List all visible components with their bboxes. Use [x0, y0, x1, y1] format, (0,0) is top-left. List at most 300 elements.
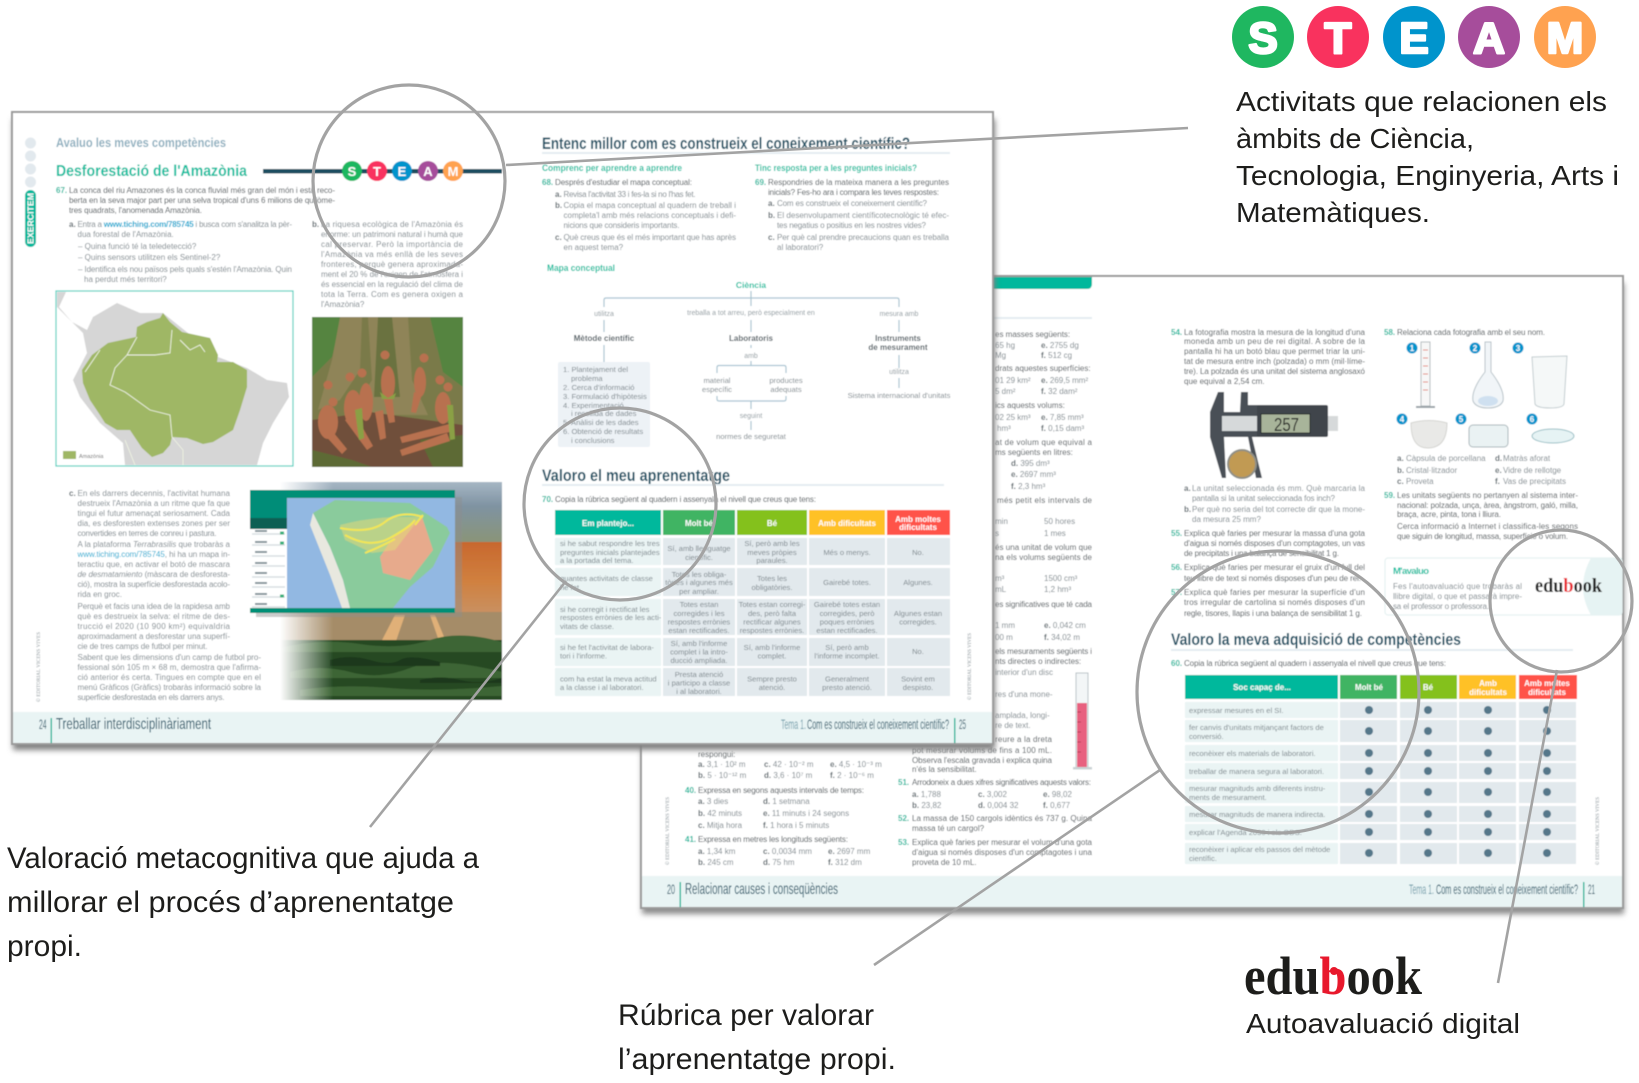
- text block: metacognitive assessment: [7, 842, 479, 963]
- text block: exercise 58: b.: [1397, 466, 1404, 475]
- text block: exercise 59: nacional: polzada, unça, àrea, àngstrom, galó, milla,: [1397, 501, 1578, 510]
- text block: exercise 58: e.: [1495, 466, 1502, 475]
- text block: part c: rida en groc.: [78, 590, 122, 599]
- table: learning rubric: Gairebé totes estan: [814, 600, 880, 609]
- map: Amazon region: Amazònia: [79, 454, 104, 460]
- text block: partially hidden exercises: e. 0,042 cm: [1044, 621, 1086, 630]
- text block: partially hidden exercises: re de text.: [995, 721, 1031, 730]
- icon: small STEAM bar: E: [398, 164, 407, 179]
- table: learning rubric: com ha estat la meva actitud: [560, 674, 657, 684]
- table: learning rubric: estan rectificades.: [668, 626, 730, 635]
- text block: exercises 39-41: a. 3,1 · 10² m: [698, 760, 746, 769]
- table: competency rubric: fer canvis d'unitats mitjançant factors de: [1189, 723, 1324, 732]
- text block: partially hidden exercises: interior d'un disc: [995, 668, 1053, 677]
- table: learning rubric: Algunes estan: [894, 609, 942, 618]
- text block: exercises 50-53: d'aigua si només disposes d'un comptagotes i una: [912, 848, 1093, 857]
- panel: back spread (pages 20-21): [641, 276, 1624, 914]
- icon: small STEAM bar: [263, 161, 502, 181]
- table: learning rubric: científic.: [685, 553, 713, 562]
- table: competency rubric: Bé: [1423, 683, 1434, 692]
- screenshot: Terrabrasilis platform: [250, 490, 462, 617]
- text block: Tinc resposta per a les preguntes inicials?: El desenvolupament científicotecnològic té efec-: [777, 211, 949, 220]
- text block: part c: www.tiching.com/785745, hi ha un mapa in-: [76, 550, 230, 559]
- table: learning rubric: presto atenció.: [822, 683, 872, 692]
- footer: left page: Com es construeix el coneixement científic?: [807, 716, 949, 732]
- logo: edubook: edubook: [1244, 946, 1422, 1006]
- heading: Valoro la meva adquisició de competències: Copia la rúbrica següent al quadern i assenyala el nivell que creus que tens:: [1184, 659, 1446, 668]
- text block: partially hidden exercises: 1,2 hm³: [1044, 585, 1071, 594]
- text block: Tinc resposta per a les preguntes inicials?: a.: [768, 199, 775, 208]
- text block: rubric description: [618, 999, 896, 1076]
- text block: Comprenc per aprendre a aprendre: Revisa l'activitat 33 i fes-la si no l'has fet.: [564, 190, 696, 199]
- text block: Tinc resposta per a les preguntes inicials?: Com es construeix el coneixement científic?: [777, 199, 928, 208]
- text block: exercise 67: l'Amazònia va més enllà de les seves: [321, 250, 463, 259]
- table: learning rubric: i participo a classe: [668, 678, 730, 688]
- text block: Comprenc per aprendre a aprendre: c.: [555, 233, 562, 242]
- text block: Tinc resposta per a les preguntes inicials?: b.: [768, 211, 775, 220]
- text block: Comprenc per aprendre a aprendre: nicions que consideris importants.: [564, 221, 680, 230]
- chart: concept map: treballa a tot arreu, però especialment en: [687, 310, 815, 317]
- text block: partially hidden exercises: 1500 cm³: [1044, 574, 1078, 583]
- callout: M'avaluo self-assessment box: [1385, 558, 1622, 615]
- table: learning rubric: Totes estan: [680, 600, 718, 609]
- text block: partially hidden exercises: 5 dm²: [995, 387, 1016, 396]
- heading: Valoro el meu aprenentatge: [542, 466, 944, 504]
- table: competency rubric: científic.: [1189, 854, 1217, 863]
- table: learning rubric: Sempre presto: [747, 674, 797, 684]
- text block: exercises 39-41: e. 2697 mm: [828, 847, 871, 856]
- table: learning rubric: No.: [912, 647, 924, 656]
- text block: exercises 39-41: a. 1,34 km: [698, 847, 736, 856]
- table: learning rubric: obligatòries.: [752, 583, 792, 592]
- text block: exercises 54-57: tre). La polzada és una unitat del sistema anglosaxó: [1184, 367, 1366, 376]
- table: learning rubric: Sovint em: [901, 674, 935, 684]
- text block: STEAM description: [1236, 86, 1619, 228]
- table: competency rubric: mesurar magnituds amb diferents instru-: [1189, 784, 1326, 793]
- footer: left page: [13, 712, 992, 743]
- table: learning rubric: Sí, amb l'informe: [744, 643, 800, 652]
- table: competency rubric: © EDITORIAL VICENS VIVES: [1595, 797, 1601, 865]
- table: learning rubric: [555, 510, 973, 700]
- text block: exercise 58: Cristal·litzador: [1406, 466, 1457, 475]
- icon: large STEAM logo: A: [1473, 14, 1505, 63]
- text block: rubric description: Rúbrica per valorar: [618, 999, 874, 1032]
- text block: Tinc resposta per a les preguntes inicials?: al laboratori?: [777, 243, 824, 252]
- text block: Comprenc per aprendre a aprendre: [542, 163, 736, 252]
- text block: part c: trucció el 2020 (10 900 km²) equivaldria: [78, 622, 231, 631]
- table: learning rubric: meves pròpies: [747, 548, 797, 557]
- table: learning rubric: dificultats: [899, 523, 937, 532]
- text block: exercises 54-57: de precipitats i una balança de sensibilitat 1 g.: [1184, 549, 1339, 558]
- text block: exercises 39-41: © EDITORIAL VICENS VIVES: [665, 797, 671, 865]
- table: learning rubric: Sí, però amb les: [744, 539, 800, 548]
- callout: M'avaluo self-assessment box: sa el professor o professora.: [1393, 602, 1489, 611]
- text block: exercises 54-57: pantalla hi ha un botó blau que permet triar la uni-: [1184, 347, 1365, 356]
- text block: exercises 39-41: Expressa en segons aquests intervals de temps:: [698, 786, 864, 795]
- text block: exercise 67: ment el 20 % de l'oxigen de l'atmosfera i: [321, 270, 463, 279]
- text block: Tinc resposta per a les preguntes inicials?: inicials? Fes-ho ara i compara les teves respostes:: [768, 188, 939, 197]
- text block: part c: [36, 489, 262, 702]
- text block: digital self-assessment: Autoavaluació digital: [1246, 1008, 1520, 1039]
- text block: exercise 67: l'Amazònia?: [321, 300, 365, 309]
- table: learning rubric: Generalment: [825, 674, 870, 684]
- heading: Valoro la meva adquisició de competències: 60.: [1171, 659, 1182, 668]
- footer: left page: Treballar interdisciplinàriament: [56, 716, 211, 733]
- table: learning rubric: Bé: [767, 519, 778, 528]
- text block: partially hidden exercises: e. 2755 dg: [1041, 341, 1079, 350]
- text block: exercises 54-57: moneda amb un peu de rei digital. A sobre de la: [1184, 337, 1366, 346]
- chart: concept map: normes de seguretat: [716, 432, 787, 441]
- text block: exercise 58: d.: [1495, 454, 1502, 463]
- chart: concept map: utilitza: [889, 369, 909, 376]
- table: competency rubric: Molt bé: [1355, 683, 1384, 692]
- heading: Mapa conceptual: Mapa conceptual: [547, 263, 615, 274]
- table: competency rubric: dificultats: [1469, 688, 1507, 697]
- text block: metacognitive assessment: Valoració metacognitiva que ajuda a: [7, 842, 479, 875]
- text block: part c: ció anterior és certa. Tingues en compte que en el: [78, 673, 261, 682]
- table: learning rubric: si he fet l'activitat de labora-: [560, 643, 654, 652]
- text block: Tinc resposta per a les preguntes inicials?: Respondries de la mateixa manera a les preguntes: [768, 178, 949, 187]
- icon: lab glassware photos: 1: [1410, 344, 1415, 353]
- text block: partially hidden exercises: hm³: [997, 424, 1011, 433]
- text block: exercise 58: a.: [1397, 454, 1404, 463]
- table: learning rubric: corregides i les: [673, 609, 725, 618]
- table: competency rubric: [1185, 675, 1601, 865]
- text block: Tinc resposta per a les preguntes inicials?: [755, 163, 950, 252]
- text block: exercises 54-57: a.: [1184, 484, 1191, 493]
- table: competency rubric: explicar l'Agenda 2030 i els ODS.: [1189, 828, 1302, 837]
- table: learning rubric: si he corregit i rectificat les: [560, 605, 650, 614]
- text block: exercises 39-41: b. 245 cm: [698, 858, 734, 867]
- text block: exercises 39-41: c. 42 · 10⁻² m: [764, 760, 814, 769]
- text block: Comprenc per aprendre a aprendre: en aquest tema?: [564, 243, 624, 252]
- chart: concept map: 3. Formulació d'hipòtesis: [563, 392, 647, 401]
- text block: exercises 50-53: n'és la sensibilitat.: [912, 765, 977, 774]
- text block: exercises 54-57: d'aigua si només disposes d'un comptagotes, un vas: [1184, 539, 1365, 548]
- table: learning rubric: Amb dificultats: [818, 519, 876, 528]
- footer: left page: 24: [39, 716, 47, 732]
- chart: concept map: mesura amb: [880, 311, 919, 318]
- text block: exercise 67: cal preservar. Però la importància de: [321, 240, 464, 249]
- table: learning rubric: atenció.: [759, 683, 785, 692]
- text block: exercises 54-57: 57.: [1171, 588, 1182, 597]
- text block: exercises 50-53: Observa l'escala gravada i explica quina: [912, 756, 1053, 765]
- text block: Tinc resposta per a les preguntes inicials?: c.: [768, 233, 775, 242]
- text block: Comprenc per aprendre a aprendre: a.: [555, 190, 562, 199]
- text block: partially hidden exercises: drats aquestes superfícies:: [995, 364, 1091, 373]
- table: learning rubric: complet i la intro-: [670, 648, 728, 656]
- chart: concept map: i recollida de dades: [571, 409, 637, 418]
- table: learning rubric: tòries i algunes més: [665, 578, 733, 587]
- chart: concept map: 6. Obtenció de resultats: [563, 427, 643, 436]
- table: learning rubric: i al laboratori.: [676, 687, 722, 696]
- text block: exercises 39-41: [665, 750, 882, 867]
- chart: concept map: Laboratoris: [729, 334, 774, 343]
- footer: back spread: Relacionar causes i conseqüències: [685, 881, 838, 898]
- table: competency rubric: Amb: [1479, 679, 1497, 688]
- text block: partially hidden exercises: min: [995, 517, 1008, 526]
- table: competency rubric: reconèixer i aplicar els passos del mètode: [1189, 845, 1330, 854]
- text block: exercises 39-41: Expressa en metres les longituds següents:: [698, 835, 848, 844]
- icon: small STEAM bar: S: [348, 164, 357, 179]
- text block: partially hidden exercises: és una unitat de volum que: [995, 543, 1093, 552]
- table: learning rubric: despisto.: [903, 683, 933, 692]
- text block: exercises 39-41: c. Mitja hora: [698, 821, 743, 830]
- table: learning rubric: Més o menys.: [823, 548, 871, 557]
- text block: exercises 54-57: b.: [1184, 505, 1191, 514]
- text block: exercise 67: enorme: un patrimoni natural i humà que: [321, 230, 464, 239]
- text block: partially hidden exercises: f. 34,02 m: [1044, 633, 1080, 642]
- callout: edubook lens and leader line: [1490, 530, 1632, 983]
- text block: partially hidden exercises: 65 hg: [995, 341, 1015, 350]
- text block: exercise 58: c.: [1397, 477, 1404, 486]
- panel: front spread (pages 24-25): [12, 112, 995, 750]
- text block: exercises 54-57: teu llibre de text si només disposes d'un peu de rei.: [1184, 574, 1361, 583]
- text block: exercise 67: tres quadrats, l'anomenada Amazònia.: [69, 206, 202, 215]
- text block: exercises 39-41: d. 75 hm: [763, 858, 795, 867]
- text block: metacognitive assessment: millorar el procés d’aprenentatge: [7, 886, 454, 919]
- text block: exercise 59: Les unitats següents no pertanyen al sistema inter-: [1397, 491, 1578, 500]
- text block: exercises 50-53: e. 98,02: [1043, 790, 1072, 799]
- icon: small STEAM bar: T: [373, 164, 381, 179]
- teal header tab: [990, 277, 1092, 289]
- text block: partially hidden exercises: 00 m: [995, 633, 1013, 642]
- text block: exercise 67: – Quina funció té la teledetecció?: [78, 242, 197, 251]
- text block: exercises 50-53: pot mesurar volums de fins a 100 mL.: [912, 746, 1052, 755]
- icon: lab glassware photos: 2: [1473, 344, 1478, 353]
- text block: part c: convertides en terres de conreu i pastura.: [78, 529, 216, 538]
- text block: exercises 54-57: da mesura 25 mm?: [1192, 515, 1261, 524]
- table: competency rubric: Amb moltes: [1524, 679, 1570, 688]
- text block: exercise 67: La conca del riu Amazones és la conca fluvial més gran del món i està reco-: [69, 186, 335, 195]
- text block: exercise 59: Cerca informació a Internet i classifica-les segons: [1397, 522, 1578, 531]
- text block: exercise 67: 67.: [56, 186, 67, 195]
- text block: Comprenc per aprendre a aprendre: Què creus que és el més important que has après: [564, 233, 736, 242]
- text block: Comprenc per aprendre a aprendre: Copia el mapa conceptual al quadern de treball i: [564, 201, 736, 210]
- text block: exercises 54-57: regle, tisores, llapis i una balança de sensibilitat 1 g.: [1184, 609, 1362, 618]
- text block: Tinc resposta per a les preguntes inicials?: 69.: [755, 178, 766, 187]
- icon: digital caliper with coin: [1210, 392, 1338, 478]
- text block: partially hidden exercises: es masses següents:: [995, 330, 1070, 339]
- callout: learning rubric lens and leader line: [370, 408, 716, 827]
- text block: STEAM description: àmbits de Ciència,: [1236, 123, 1474, 154]
- text block: Tinc resposta per a les preguntes inicials?: Per què cal prendre precaucions quan es treballa: [777, 233, 950, 242]
- table: learning rubric: tori i l'informe.: [560, 652, 607, 660]
- icon: lab glassware photos: 5: [1459, 415, 1464, 424]
- text block: Comprenc per aprendre a aprendre: Comprenc per aprendre a aprendre: [542, 163, 682, 174]
- table: competency rubric: conversió.: [1189, 732, 1224, 741]
- text block: partially hidden exercises: f. 32 dam²: [1041, 387, 1078, 396]
- text block: exercises 50-53: b. 23,82: [912, 801, 942, 810]
- text block: exercises 54-57: Explica què faries per mesurar el gruix d'un full del: [1184, 563, 1365, 572]
- text block: Comprenc per aprendre a aprendre: b.: [555, 201, 562, 210]
- table: learning rubric: complet.: [758, 652, 786, 660]
- text block: Comprenc per aprendre a aprendre: 68.: [542, 178, 553, 187]
- table: competency rubric: reconèixer els materials de laboratori.: [1189, 749, 1316, 758]
- text block: partially hidden exercises: f. 512 cg: [1041, 351, 1072, 360]
- table: learning rubric: Presta atenció: [675, 670, 723, 679]
- text block: exercises 39-41: 41.: [685, 835, 696, 844]
- text block: exercises 54-57: que equival a 2,54 cm.: [1184, 377, 1264, 386]
- callout: M'avaluo self-assessment box: edubook: [1535, 576, 1602, 597]
- text block: exercises 50-53: 53.: [898, 838, 909, 847]
- table: learning rubric: Sí, però amb: [825, 643, 869, 652]
- chart: concept map: material: [703, 376, 731, 385]
- text block: exercises 50-53: proveta de 10 mL.: [912, 858, 976, 867]
- text block: Comprenc per aprendre a aprendre: Després d'estudiar el mapa conceptual:: [555, 178, 692, 187]
- text block: exercise 67: ha perdut més territori?: [84, 275, 167, 284]
- table: learning rubric: per ampliar.: [679, 587, 719, 596]
- text block: exercises 39-41: 40.: [685, 786, 696, 795]
- text block: partially hidden exercises: e. 2697 mm³: [1011, 470, 1056, 479]
- text block: exercises 54-57: Explica què faries per mesurar la superfície d'un: [1184, 588, 1365, 597]
- text block: part c: de desmatamiento (màscara de desforesta-: [78, 570, 230, 579]
- text block: exercises 50-53: c. 3,002: [978, 790, 1007, 799]
- text block: exercise 67: berta en la seva major part per una selva tropical d'uns 6 milions de quilòme-: [69, 196, 335, 205]
- chart: concept map: 2. Cerca d'informació: [563, 383, 635, 392]
- text block: exercises 54-57: Explica què faries per mesurar la massa d'una gota: [1184, 529, 1366, 538]
- chart: concept map: 1. Plantejament del: [563, 365, 628, 374]
- chart: concept map: Ciència: [736, 280, 766, 290]
- text block: exercises 50-53: massa té un cargol?: [912, 824, 985, 833]
- text block: exercises 50-53: a. 1,788: [912, 790, 941, 799]
- chart: concept map: 4. Experimentació: [563, 401, 624, 410]
- table: learning rubric: he fet.: [560, 583, 581, 592]
- table: learning rubric: Em plantejo...: [582, 519, 634, 528]
- photo: indigenous people in the rainforest: [312, 317, 463, 467]
- table: competency rubric: dificultats: [1528, 688, 1566, 697]
- heading: Valoro el meu aprenentatge: Copia la rúbrica següent al quadern i assenyala el nivell que creus que tens:: [555, 495, 816, 504]
- chart: concept map: Mètode científic: [574, 334, 635, 343]
- text block: partially hidden exercises: 1 mes: [1044, 529, 1066, 538]
- text block: exercises 39-41: b. 42 minuts: [698, 809, 742, 818]
- table: competency rubric: ments de mesurament.: [1189, 793, 1267, 802]
- text block: exercises 39-41: a. 3 dies: [698, 797, 728, 806]
- icon: small STEAM bar: M: [448, 164, 458, 179]
- text block: partially hidden exercises: 02 25 km³: [995, 413, 1031, 422]
- text block: exercise 58: Càpsula de porcellana: [1406, 454, 1486, 463]
- table: learning rubric: quantes activitats de classe: [560, 574, 653, 583]
- map: Amazon region: [56, 291, 293, 466]
- table: learning rubric: No.: [912, 548, 924, 557]
- table: learning rubric: estan rectificades.: [816, 626, 878, 635]
- table: learning rubric: si he sabut respondre les tres: [560, 539, 660, 548]
- table: learning rubric: preguntes inicials plantejades: [560, 548, 660, 557]
- text block: part c: tingui el futur amenaçat seriosament. Cada: [78, 509, 231, 518]
- chart: concept map: adequats: [770, 385, 802, 394]
- table: learning rubric: Algunes.: [903, 578, 933, 587]
- text block: part c: destrueix l'Amazònia a un ritme que fa que: [78, 499, 231, 508]
- text block: exercises 39-41: e. 4,5 · 10⁻³ m: [830, 760, 882, 769]
- text block: exercises 54-57: tat de mesura entre inch (polzada) o mm (mil·líme-: [1184, 357, 1365, 366]
- text block: exercise 67: La riquesa ecològica de l'Amazònia és: [321, 220, 463, 229]
- table: learning rubric: des, però falta: [748, 609, 797, 618]
- text block: exercise 67: a.: [69, 220, 76, 229]
- text block: STEAM description: Activitats que relacionen els: [1236, 86, 1607, 117]
- text block: exercises 50-53: Arrodoneix a dues xifres significatives aquests valors:: [912, 778, 1091, 787]
- text block: exercise 58: Vidre de rellotge: [1503, 466, 1562, 475]
- text block: exercise 58: [1384, 328, 1566, 486]
- table: learning rubric: Molt bé: [685, 519, 714, 528]
- footer: left page: Tema 1.: [781, 716, 806, 732]
- text block: exercise 67: fronteres, perquè genera aproximada-: [321, 260, 463, 269]
- text block: exercises 50-53: d. 0,004 32: [978, 801, 1019, 810]
- text block: part c: cie de tres camps de futbol per minut.: [78, 642, 208, 651]
- text block: exercises 54-57: 54.: [1171, 328, 1182, 337]
- chart: concept map: específic: [702, 385, 732, 394]
- text block: exercises 54-57: Per què no seria del tot correcte dir que la mone-: [1192, 505, 1365, 514]
- text block: exercises 54-57: La fotografia mostra la mesura de la longitud d'una: [1184, 328, 1366, 337]
- text block: partially hidden exercises: e. 269,5 mm²: [1041, 376, 1088, 385]
- text block: metacognitive assessment: propi.: [7, 930, 82, 963]
- text block: partially hidden exercises: na els volums següents de: [995, 553, 1093, 562]
- heading: Valoro el meu aprenentatge: Valoro el meu aprenentatge: [542, 466, 730, 485]
- text block: part c: Sabent que les dimensions d'un camp de futbol pro-: [78, 653, 261, 662]
- callout: M'avaluo self-assessment box: M'avaluo: [1393, 566, 1429, 577]
- table: learning rubric: Amb moltes: [895, 515, 941, 524]
- text block: partially hidden exercises: e. 7,85 mm³: [1041, 413, 1084, 422]
- table: learning rubric: paraules.: [756, 556, 788, 565]
- text block: partially hidden exercises: més petit els intervals de: [997, 496, 1093, 505]
- text block: exercises 54-57: tros irregular de cartolina si només disposes d'un: [1184, 598, 1365, 607]
- icon: large STEAM logo: S: [1248, 14, 1278, 63]
- table: learning rubric: rectificar algunes: [743, 618, 801, 626]
- text block: part c: què es destrueix la selva: el ritme de des-: [78, 612, 230, 621]
- text block: partially hidden exercises: d. 395 dm³: [1011, 459, 1050, 468]
- icon: large STEAM logo: T: [1325, 14, 1352, 63]
- text block: exercise 58: Relaciona cada fotografia amb el seu nom.: [1397, 328, 1545, 337]
- text block: exercise 67: – Identifica els nou països pels quals s'estén l'Amazònia. Quin: [78, 265, 292, 274]
- text block: Tinc resposta per a les preguntes inicials?: Tinc resposta per a les preguntes inicials?: [755, 163, 917, 174]
- table: learning rubric: Sí, amb llenguatge: [667, 544, 731, 553]
- chart: concept map: seguint: [740, 413, 762, 420]
- table: learning rubric: respostes errònies de les acti-: [560, 613, 662, 622]
- text block: STEAM description: Tecnologia, Enginyeria, Arts i: [1236, 160, 1619, 191]
- icon: large STEAM logo: [1232, 6, 1596, 68]
- chart: concept map: amb: [744, 353, 758, 360]
- table: learning rubric: Gairebé totes.: [823, 578, 871, 587]
- icon: lab glassware photos: [1396, 342, 1574, 448]
- icon: lab glassware photos: 3: [1516, 344, 1521, 353]
- text block: exercises 39-41: f. 2 · 10⁻⁶ m: [830, 771, 874, 780]
- chart: concept map: 5. Anàlisi de les dades: [563, 418, 639, 427]
- icon: lab glassware photos: 4: [1400, 415, 1405, 424]
- table: learning rubric: vitats de classe.: [560, 622, 614, 631]
- text block: exercise 58: Matràs aforat: [1503, 454, 1551, 463]
- table: learning rubric: l'informe incomplet.: [814, 652, 880, 660]
- heading: Valoro la meva adquisició de competències: Valoro la meva adquisició de competències: [1171, 630, 1461, 649]
- text block: partially hidden exercises: reure a la dreta: [995, 735, 1053, 744]
- text block: exercise 67: tota la Terra. Com es genera oxigen a: [321, 290, 464, 299]
- side tabs: [25, 138, 36, 247]
- chart: concept map: i conclusions: [571, 436, 615, 445]
- table: learning rubric: corregides, però: [820, 609, 874, 618]
- text block: partially hidden exercises: ms següents en litres:: [995, 448, 1073, 457]
- table: learning rubric: respostes errònies: [668, 618, 730, 626]
- icon: large STEAM logo: M: [1547, 14, 1583, 63]
- chart: concept map: Instruments: [875, 334, 921, 343]
- callout: competency rubric lens and leader line: [874, 551, 1419, 965]
- text block: part c: superfície desforestada en els darrers anys.: [78, 693, 224, 702]
- text block: partially hidden exercises: nts directes o indirectes:: [995, 657, 1081, 666]
- text block: partially hidden exercises: f. 0,15 dam³: [1041, 424, 1084, 433]
- text block: exercise 59: braça, acre, pinta, tona i lliura.: [1397, 510, 1501, 519]
- text block: partially hidden exercises: els mesuraments següents i: [995, 647, 1092, 656]
- text block: exercise 58: Vas de precipitats: [1503, 477, 1566, 486]
- text block: partially hidden exercises: amplada, longi-: [995, 711, 1050, 720]
- text block: partially hidden exercises: ics aquests volums:: [995, 401, 1065, 410]
- text block: exercise 67: és essencial en la regulació del clima de: [321, 280, 464, 289]
